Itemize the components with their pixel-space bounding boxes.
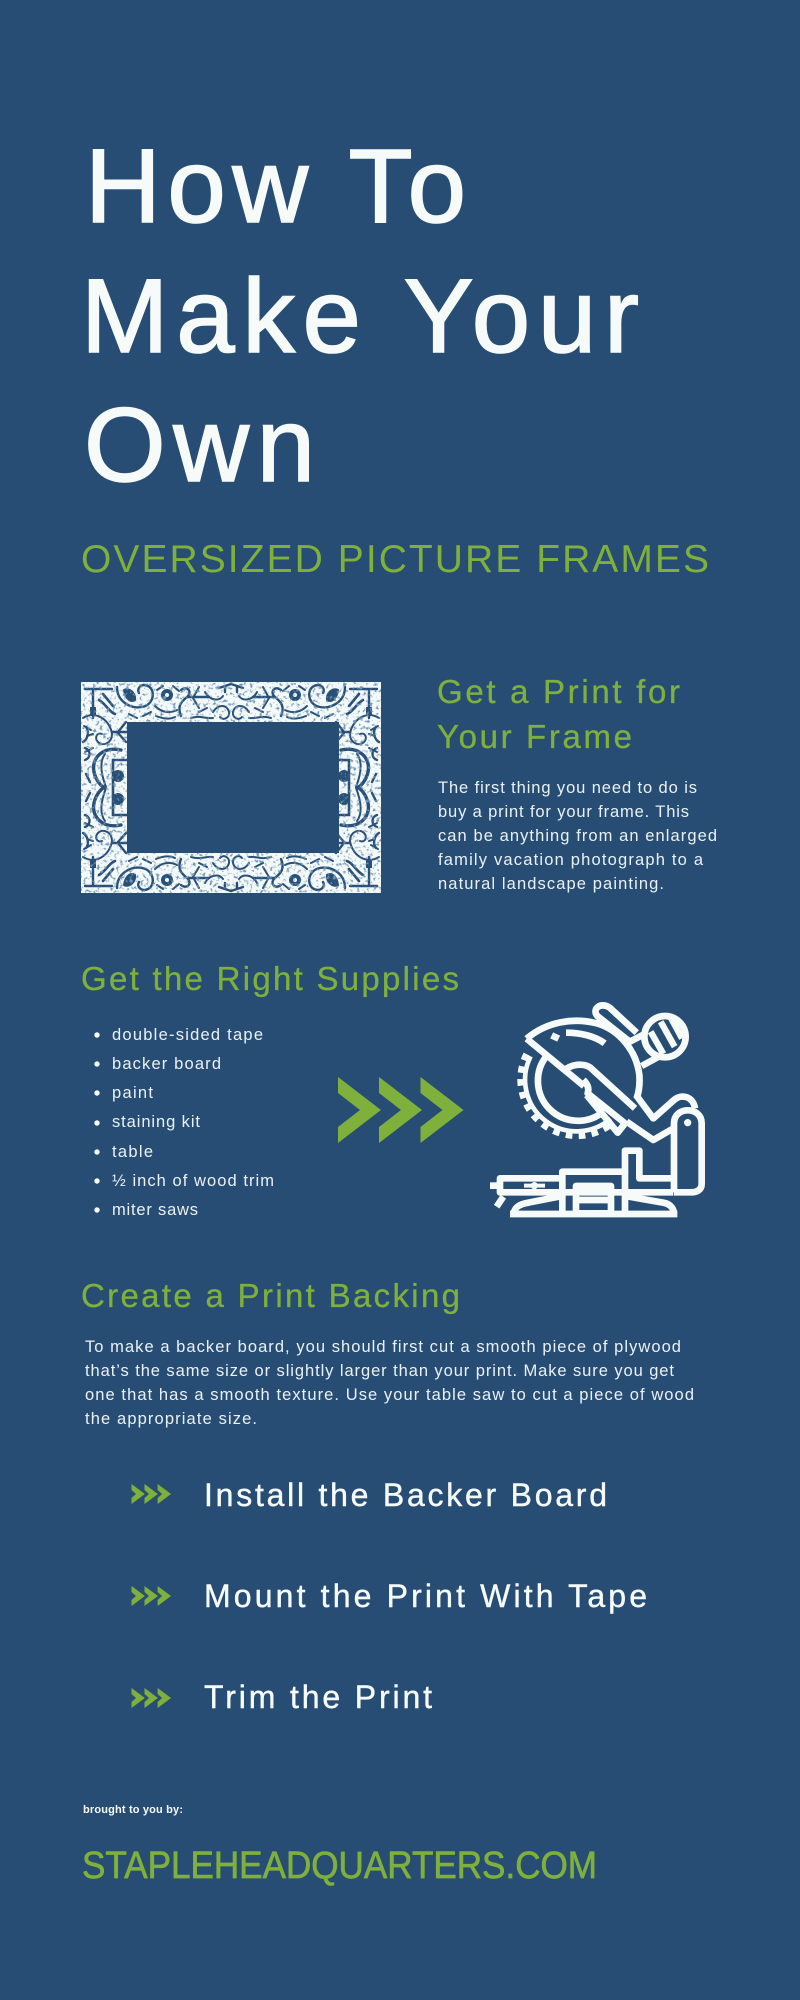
panel: get the right supplies — [81, 960, 702, 1219]
image: ornate picture frame — [81, 682, 381, 893]
supplies list: table — [112, 1143, 153, 1161]
text block: print description: The first thing you need to do is — [438, 779, 697, 797]
supplies list: ½ inch of wood trim — [112, 1172, 274, 1190]
header: title and subtitle — [81, 128, 709, 581]
text block: backing description — [85, 1338, 694, 1428]
panel: get a print — [81, 673, 717, 893]
supplies list — [94, 1026, 274, 1219]
subtitle: OVERSIZED PICTURE FRAMES — [81, 538, 709, 581]
supplies list: backer board — [112, 1055, 221, 1073]
title — [81, 128, 639, 504]
heading: get a print for your frame: Your Frame — [437, 718, 632, 755]
brought to you by: brought to you by: — [83, 1804, 183, 1816]
website: STAPLEHEADQUARTERS.COM — [82, 1845, 597, 1887]
supplies list: double-sided tape — [112, 1026, 263, 1044]
step: trim the print: Trim the Print — [204, 1679, 432, 1715]
supplies list: paint — [112, 1084, 153, 1102]
icon: miter saw — [490, 1005, 702, 1214]
supplies list: staining kit — [112, 1113, 200, 1131]
heading: get the right supplies: Get the Right Supplies — [81, 960, 459, 997]
supplies list: miter saws — [112, 1201, 198, 1219]
text block: backing description: that’s the same size or slightly larger than your print. Make sure you get — [85, 1362, 674, 1380]
heading: get a print for your frame — [437, 673, 680, 755]
title: Own — [84, 387, 315, 504]
text block: print description: natural landscape painting. — [438, 875, 664, 893]
text block: backing description: To make a backer board, you should first cut a smooth piece of plywood — [85, 1338, 681, 1356]
title: How To — [85, 128, 466, 245]
text block: print description: buy a print for your frame. This — [438, 803, 689, 821]
text block: backing description: one that has a smooth texture. Use your table saw to cut a piece of wood — [85, 1386, 694, 1404]
text block: print description: can be anything from an enlarged — [438, 827, 717, 845]
title: Make Your — [81, 258, 639, 375]
step: mount the print with tape: Mount the Print With Tape — [204, 1578, 647, 1614]
text block: print description: family vacation photograph to a — [438, 851, 704, 869]
steps list — [132, 1477, 647, 1715]
step: install the backer board: Install the Backer Board — [204, 1477, 607, 1513]
heading: get a print for your frame: Get a Print for — [437, 673, 680, 710]
panel: create a print backing — [81, 1277, 694, 1428]
arrow: large triple chevron — [338, 1077, 464, 1143]
footer: source credit — [82, 1804, 597, 1887]
text block: backing description: the appropriate size. — [85, 1410, 257, 1428]
text block: print description — [438, 779, 717, 893]
heading: create a print backing: Create a Print Backing — [81, 1277, 460, 1314]
